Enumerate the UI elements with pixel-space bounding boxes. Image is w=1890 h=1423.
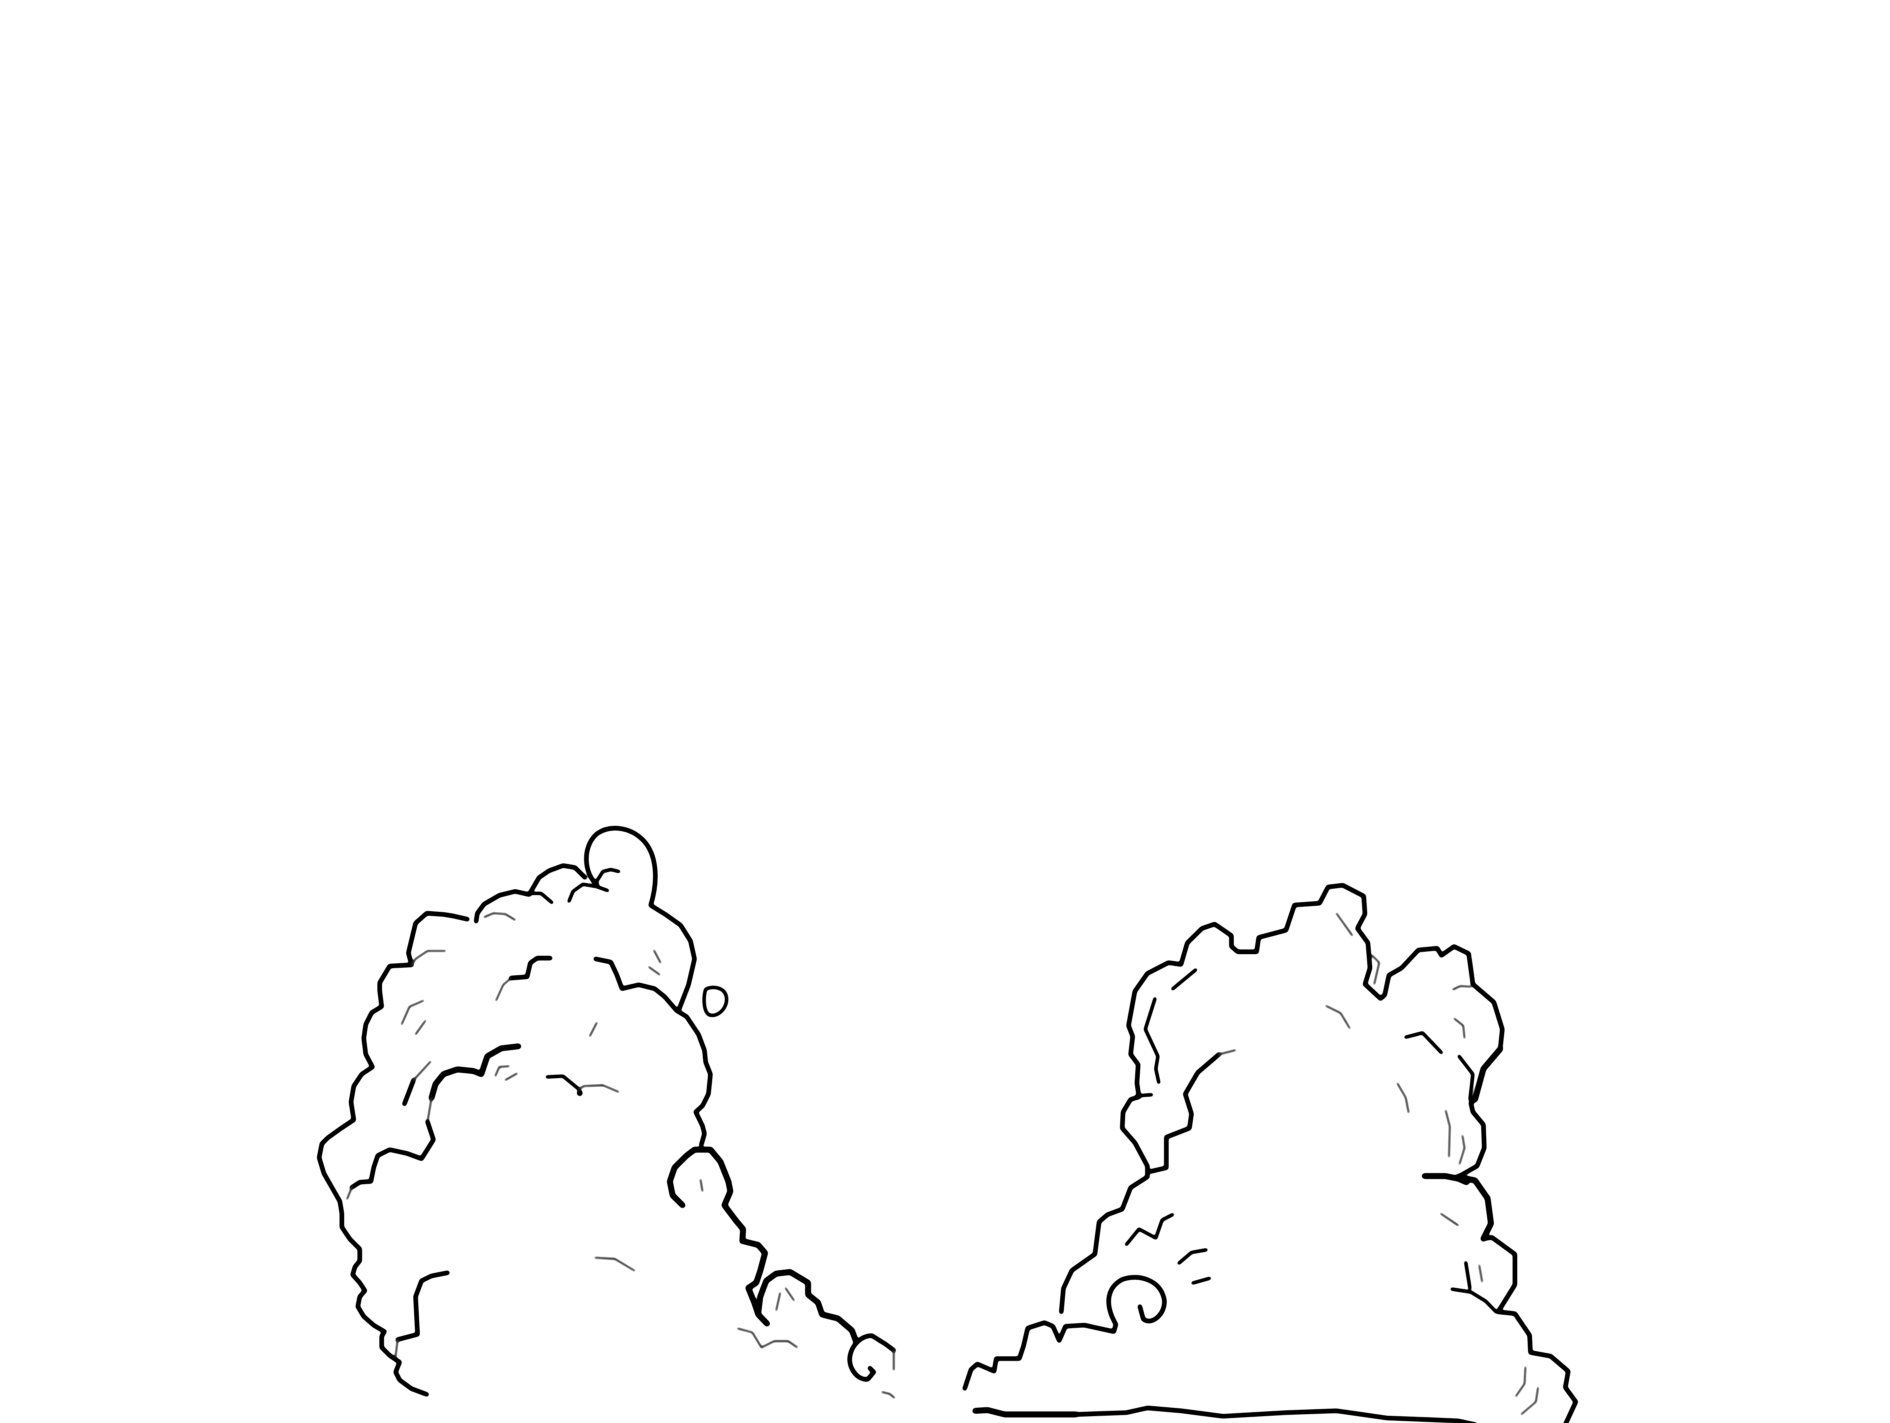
left cloud <box>319 828 895 1398</box>
small puff beside left cloud <box>704 987 727 1015</box>
left cloud curls and spiral <box>529 870 894 1379</box>
left cloud outer outline <box>319 828 856 1394</box>
right cloud inner contours <box>1137 999 1496 1312</box>
right cloud heavy outline accents <box>975 1049 1500 1414</box>
right cloud main outline <box>1061 885 1576 1423</box>
ink drawing of both clouds <box>319 828 1576 1423</box>
left cloud inner contours <box>347 958 619 1356</box>
right cloud shading strokes <box>1126 913 1538 1414</box>
right cloud lower left outline and swirl <box>965 1277 1164 1388</box>
right cloud base line <box>975 1408 1475 1423</box>
right cloud <box>965 885 1576 1423</box>
left cloud shading strokes <box>402 913 895 1398</box>
